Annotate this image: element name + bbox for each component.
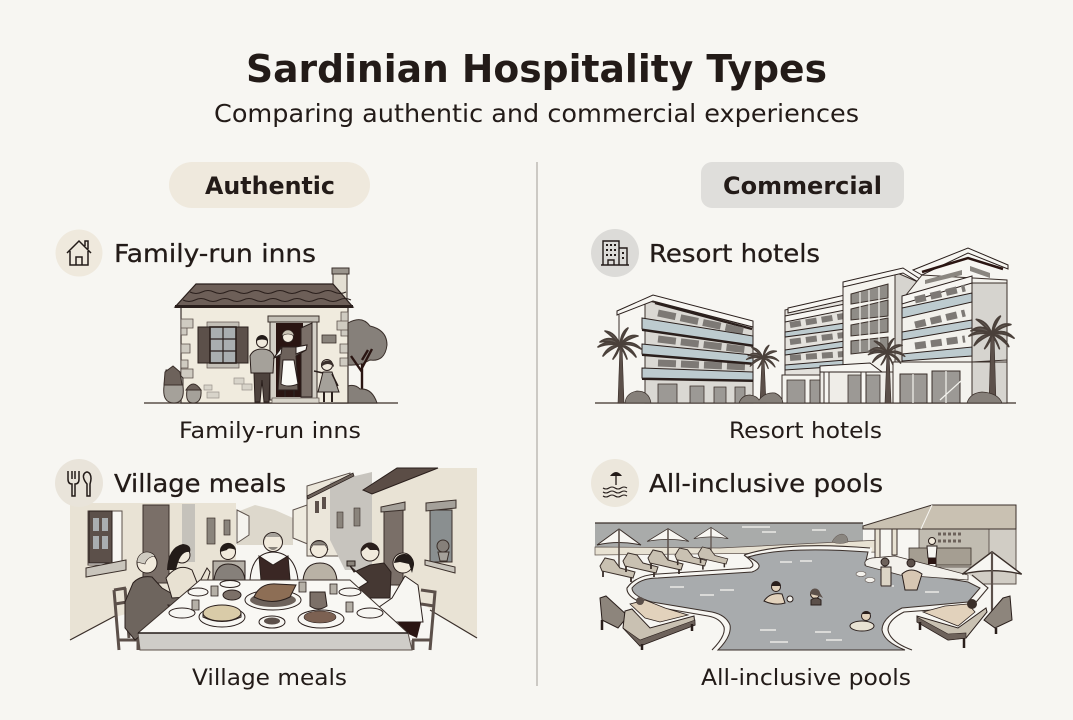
doors and windows	[86, 497, 456, 585]
seated family	[125, 532, 423, 640]
illustration: stone family inn	[144, 268, 398, 403]
column header: Authentic: Authentic	[205, 172, 335, 200]
right tower	[902, 248, 1008, 365]
caption: All-inclusive pools: All-inclusive pools	[701, 666, 911, 691]
people at the bar	[881, 558, 922, 590]
icon: hotel building	[591, 229, 639, 277]
chimney	[332, 268, 349, 303]
bar ledge and rocks	[856, 556, 968, 582]
dishes	[169, 580, 383, 628]
man with glass	[347, 543, 391, 598]
sea and deck	[595, 523, 880, 555]
heading: Resort hotels: Resort hotels	[649, 239, 820, 268]
column header: Commercial: Commercial	[723, 172, 882, 200]
palm trees	[598, 316, 1014, 403]
column header: Commercial	[701, 162, 904, 208]
caption: Family-run inns: Family-run inns	[179, 419, 361, 444]
far umbrellas	[597, 527, 728, 571]
street backdrop	[70, 468, 477, 640]
central tower	[843, 268, 920, 403]
icon: pool with umbrella	[591, 459, 639, 507]
illustration: resort pool	[595, 505, 1022, 650]
subtitle: Comparing authentic and commercial experiences	[214, 99, 859, 128]
column header: Authentic	[169, 162, 370, 208]
heading: All-inclusive pools: All-inclusive pools	[649, 469, 883, 498]
roof	[175, 284, 353, 308]
caption: Village meals: Village meals	[192, 666, 347, 691]
pool	[627, 546, 988, 650]
hotel base and entrance	[782, 360, 1007, 403]
shrubs	[625, 391, 1002, 403]
front left sun loungers with bathers	[600, 596, 695, 650]
heading: Village meals: Village meals	[114, 469, 286, 498]
door	[268, 316, 336, 403]
far sun loungers	[600, 547, 728, 582]
grandmother with apron	[274, 330, 307, 397]
icon: fork and spoon	[55, 459, 103, 507]
grandfather	[250, 532, 298, 580]
clay pots	[164, 366, 201, 403]
man	[250, 335, 274, 402]
older woman	[303, 540, 337, 580]
illustration: village meal	[70, 468, 477, 650]
heading: Family-run inns: Family-run inns	[114, 239, 316, 268]
swimmers	[764, 581, 874, 631]
girl	[314, 360, 339, 402]
left hotel block	[617, 295, 753, 403]
chairs	[114, 588, 435, 650]
swim-up bar	[863, 505, 1016, 584]
old man	[125, 552, 183, 640]
title: Sardinian Hospitality Types	[246, 47, 827, 91]
wall	[181, 307, 348, 403]
illustration: resort hotels	[595, 248, 1016, 403]
icon: house	[56, 230, 102, 276]
window with shutters	[198, 322, 248, 368]
table	[138, 580, 412, 650]
man in white	[372, 553, 423, 638]
low right wing	[785, 295, 845, 403]
caption: Resort hotels: Resort hotels	[729, 419, 882, 444]
front right sun loungers with bathers	[917, 596, 1012, 648]
child	[213, 543, 245, 580]
tree	[348, 320, 387, 403]
woman	[166, 544, 210, 598]
near umbrella	[962, 552, 1022, 611]
